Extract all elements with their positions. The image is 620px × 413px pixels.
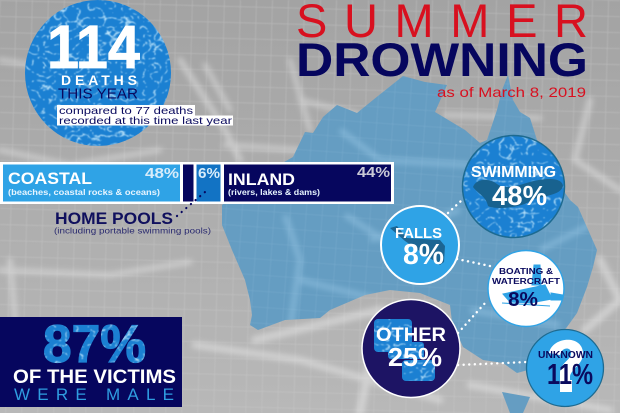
circle: swimming [462, 136, 564, 238]
icon: watercraft [502, 265, 563, 306]
segment: coastal: (beaches, coastal rocks & oceans) [8, 187, 160, 197]
circle: falls: 8% [403, 239, 444, 271]
circle: falls [381, 206, 459, 284]
circle: swimming: SWIMMING [471, 164, 556, 181]
comparison note: compared to 77 deaths [59, 105, 193, 117]
comparison note: recorded at this time last year [59, 115, 233, 127]
connectors [448, 200, 526, 365]
box: 87 percent male [0, 315, 182, 407]
label: home pools: (including portable swimming pools) [54, 226, 211, 236]
segment: inland: 44% [357, 164, 390, 181]
circle: other [362, 300, 460, 398]
circle: boating [488, 250, 564, 326]
comparison note [57, 105, 233, 127]
label this year: THIS YEAR [58, 86, 138, 102]
segment: coastal [3, 164, 180, 202]
label: home pools: HOME POOLS [55, 210, 173, 228]
circle: boating: BOATING & [499, 266, 553, 276]
segment: inland: (rivers, lakes & dams) [228, 187, 320, 197]
were male: WERE MALE [14, 385, 174, 404]
number 87%: 87% [43, 315, 146, 374]
circle: 114 deaths [25, 0, 233, 146]
segment: coastal: COASTAL [8, 169, 92, 188]
segment: inland: INLAND [228, 170, 295, 189]
icon: swimmer [473, 179, 563, 208]
of the victims: OF THE VICTIMS [13, 366, 176, 388]
icon: falling person [390, 226, 445, 265]
circle: swimming: 48% [492, 180, 547, 211]
segment: coastal: 48% [145, 165, 179, 182]
circle: boating: WATERCRAFT [492, 276, 561, 286]
segment: inland [224, 164, 391, 202]
segment: navy spacer [183, 164, 194, 202]
circle: other: 25% [388, 342, 442, 372]
number 114: 114 [47, 13, 140, 81]
title [296, 0, 588, 100]
circle: boating: 8% [508, 289, 538, 311]
segment: home pools: 6% [198, 165, 220, 182]
title: drowning: DROWNING [296, 33, 588, 86]
circle: other: OTHER [376, 324, 446, 346]
location bar [0, 162, 394, 204]
circle: falls: FALLS [395, 226, 442, 242]
circle: unknown [526, 330, 604, 406]
icon: chat bubbles [374, 319, 412, 352]
icon: question mark [549, 340, 583, 380]
circle: unknown: UNKNOWN [538, 350, 593, 361]
label: home pools [54, 192, 211, 236]
circle: unknown: 11% [547, 359, 593, 391]
date: as of March 8, 2019 [437, 84, 586, 100]
segment: home pools [196, 164, 220, 202]
label deaths: DEATHS [61, 72, 137, 88]
map of Australia [222, 75, 597, 413]
